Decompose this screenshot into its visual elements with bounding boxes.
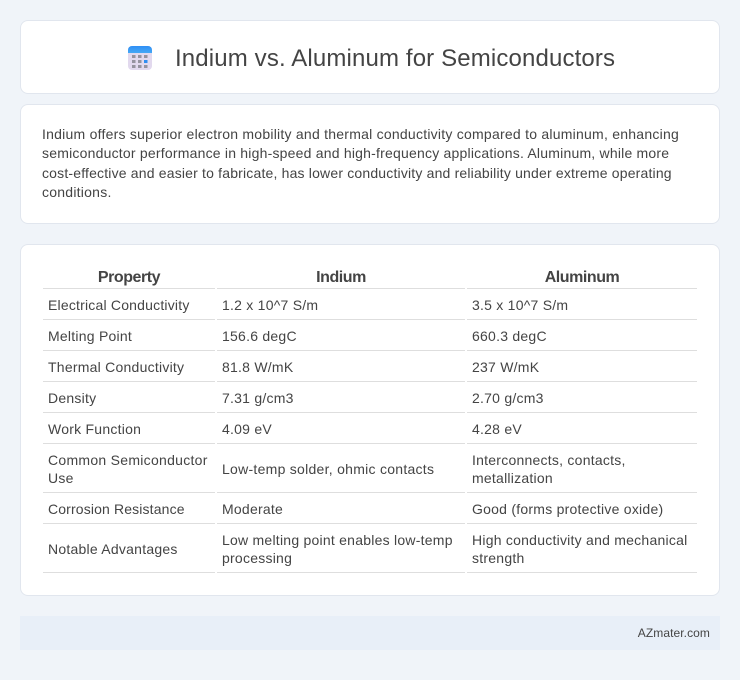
row: electrical conductivity: [48, 297, 568, 313]
icon: calendar grid: [128, 46, 152, 70]
intro paragraph: cost-effective and easier to fabricate, has lower conductivity and reliability under extreme operating: [42, 165, 672, 181]
row: common semiconductor use: Common Semiconductor: [48, 452, 208, 468]
row: thermal conductivity: 81.8 W/mK: [222, 359, 293, 375]
row: melting point: [48, 328, 547, 344]
row: common semiconductor use: Interconnects, contacts,: [472, 452, 626, 468]
panel: comparison table: [20, 244, 720, 596]
title: Indium vs. Aluminum for Semiconductors: [175, 45, 615, 72]
row: work function: [48, 421, 522, 437]
row: melting point: 156.6 degC: [222, 328, 297, 344]
row: density: 2.70 g/cm3: [472, 390, 544, 406]
row: melting point: 660.3 degC: [472, 328, 547, 344]
row: common semiconductor use: Low-temp solder, ohmic contacts: [222, 461, 434, 477]
row: notable advantages: strength: [472, 550, 525, 566]
footer bar: [20, 616, 720, 650]
panel: introduction text: [20, 104, 720, 224]
row: work function: 4.09 eV: [222, 421, 272, 437]
panel: title card: [20, 20, 720, 94]
row: corrosion resistance: Good (forms protective oxide): [472, 501, 663, 517]
row: corrosion resistance: [48, 501, 663, 517]
row: corrosion resistance: Corrosion Resistance: [48, 501, 185, 517]
row: notable advantages: Low melting point enables low-temp: [222, 532, 453, 548]
row: notable advantages: [48, 532, 687, 566]
table header: Aluminum: [545, 269, 619, 286]
row: electrical conductivity: 3.5 x 10^7 S/m: [472, 297, 568, 313]
row: notable advantages: High conductivity and mechanical: [472, 532, 687, 548]
row: melting point: Melting Point: [48, 328, 132, 344]
intro paragraph: Indium offers superior electron mobility and thermal conductivity compared to aluminum, enhancing: [42, 126, 679, 142]
row: thermal conductivity: 237 W/mK: [472, 359, 539, 375]
intro paragraph: conditions.: [42, 184, 112, 200]
intro paragraph: [42, 126, 679, 200]
row: density: 7.31 g/cm3: [222, 390, 294, 406]
row: density: [48, 390, 544, 406]
row: work function: Work Function: [48, 421, 141, 437]
row: electrical conductivity: Electrical Conductivity: [48, 297, 190, 313]
row: work function: 4.28 eV: [472, 421, 522, 437]
row: common semiconductor use: Use: [48, 470, 74, 486]
row: notable advantages: Notable Advantages: [48, 541, 178, 557]
table header: Indium: [316, 269, 366, 286]
table header: Property: [98, 269, 160, 286]
row: thermal conductivity: [48, 359, 539, 375]
row: thermal conductivity: Thermal Conductivity: [48, 359, 184, 375]
row: electrical conductivity: 1.2 x 10^7 S/m: [222, 297, 318, 313]
row: density: Density: [48, 390, 96, 406]
footer source text: AZmater.com: [638, 626, 710, 640]
row: common semiconductor use: [48, 452, 626, 486]
row: common semiconductor use: metallization: [472, 470, 553, 486]
intro paragraph: semiconductor performance in high-speed and high-frequency applications. Aluminum, while more: [42, 145, 669, 161]
row: corrosion resistance: Moderate: [222, 501, 283, 517]
table header: [98, 269, 619, 286]
row: notable advantages: processing: [222, 550, 292, 566]
